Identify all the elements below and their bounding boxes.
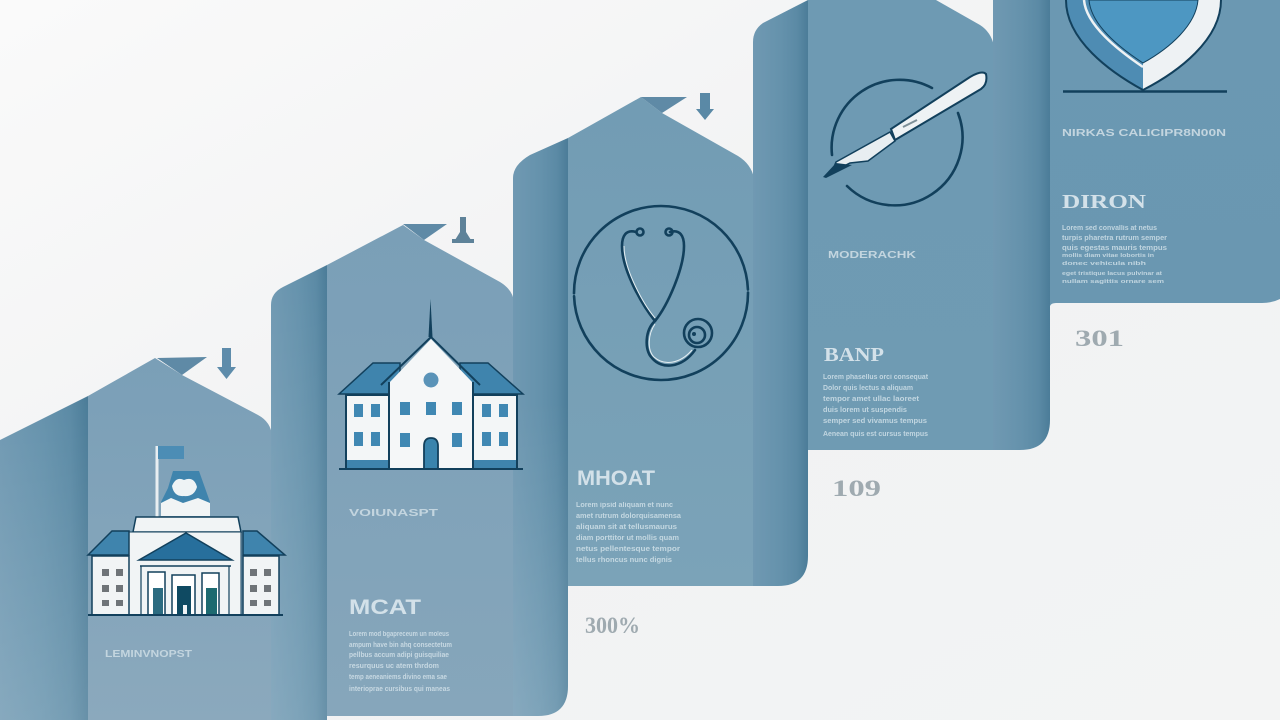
step 5 body text: Lorem sed convallis at netus [1062,225,1157,232]
step 3 figure: 300% [585,613,640,638]
step 4 heading: BANP [824,344,884,366]
step 1 label: LEMINVNOPST [105,649,192,660]
icon: scalpel [823,73,986,205]
step 3 body text: aliquam sit at tellusmaurus [576,524,677,531]
icon: college building [339,299,523,469]
step 4 body text: semper sed vivamus tempus [823,418,927,425]
fold tab 3 [641,97,687,113]
step 2 body text: resurquus uc atem thrdom [349,663,439,670]
fold tab 2 [403,224,447,240]
step 2: panel background [271,225,514,720]
step 2 body text: interioprae cursibus qui maneas [349,686,450,693]
fold tab 1 [157,357,207,375]
step 3 body text: netus pellentesque tempor [576,546,680,553]
step 5 figure: 301 [1075,326,1124,351]
step 4 body text [823,374,929,438]
step 3 heading: MHOAT [577,467,655,490]
step 2 body text [349,631,452,693]
step 4: panel background [753,0,994,586]
step 2 body text: temp aeneaniems divino ema sae [349,674,447,681]
step 2 heading: MCAT [349,596,421,619]
step 5 body text: turpis pharetra rutrum semper [1062,235,1167,242]
step 3 body text [576,502,681,564]
step 5 body text: mollis diam vitae lobortis in [1062,253,1154,259]
step 5: panel background [993,0,1280,450]
step 2 body text: ampum have bin ahq consectetum [349,642,452,649]
step 4 body text: duis lorem ut suspendis [823,407,907,414]
arrow 1 [217,348,236,379]
step 5 body text: nullam sagittis ornare sem [1062,279,1165,285]
icon: university building [88,446,285,615]
icon: stethoscope [574,206,748,380]
step 1: panel background [0,358,272,720]
step 4 body text: Dolor quis lectus a aliquam [823,385,913,392]
step 3 body text: Lorem ipsid aliquam et nunc [576,502,673,509]
arrow 2 [452,217,474,243]
step 3 body text: tellus rhoncus nunc dignis [576,557,672,564]
step 2 body text: pellbus accum adipi guisquiliae [349,652,449,659]
icon: shield [1063,0,1227,92]
step 5 body text [1062,225,1167,285]
arrow 3 [696,93,714,120]
step 5 body text: quis egestas mauris tempus [1062,245,1167,252]
step 2 label: VOIUNASPT [349,508,438,519]
step 4 body text: Aenean quis est cursus tempus [823,431,928,438]
step 5 body text: eget tristique lacus pulvinar at [1062,271,1162,277]
step 4 label: MODERACHK [828,250,917,261]
step 5 heading: DIRON [1062,191,1147,213]
step 4 figure: 109 [832,476,881,501]
step 3 body text: diam porttitor ut mollis quam [576,535,679,542]
step 2 body text: Lorem mod bgapreceum un moleus [349,631,449,638]
step 5 label: NIRKAS CALICIPR8N00N [1062,128,1226,139]
step 4 body text: Lorem phasellus orci consequat [823,374,929,381]
step 3: panel background [513,97,754,716]
step 3 body text: amet rutrum dolorquisamensa [576,513,681,520]
step 5 body text: donec vehicula nibh [1062,261,1146,267]
step 4 body text: tempor amet ullac laoreet [823,396,920,403]
